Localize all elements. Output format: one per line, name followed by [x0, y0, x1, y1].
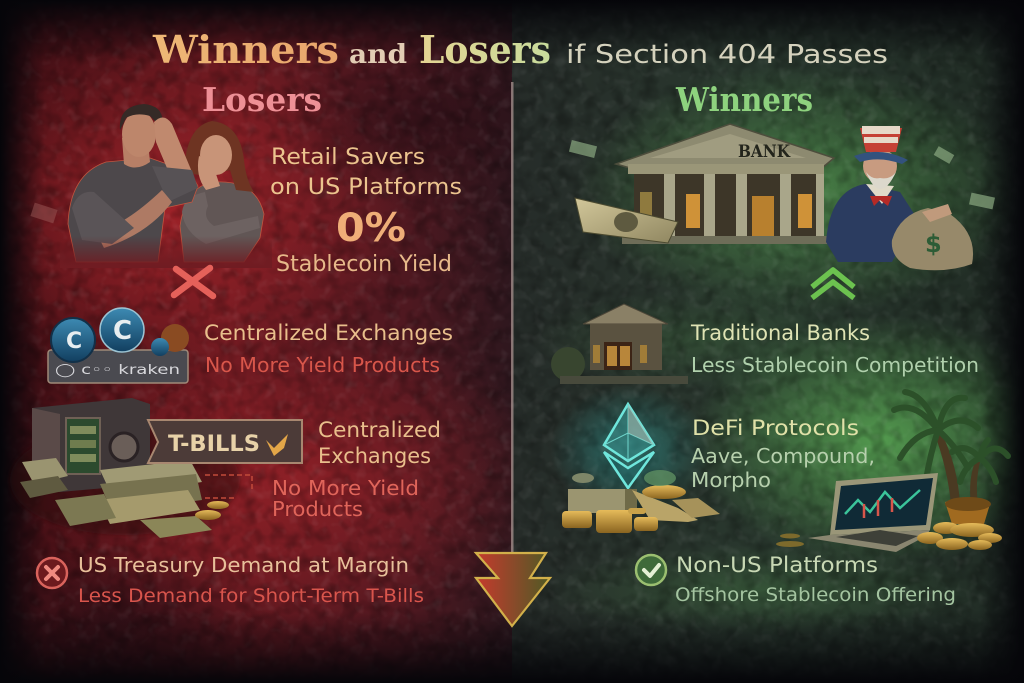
illustration: small bank: [551, 304, 688, 384]
text: non-US platforms: [675, 553, 956, 606]
heading: Winners: Winners: [675, 80, 813, 119]
label: T-bills plaque: [148, 420, 302, 463]
text: centralized exchanges 2: Exchanges: [318, 444, 431, 468]
text: centralized exchanges 2: Centralized: [318, 418, 441, 442]
illustration: palm trees: [894, 392, 1008, 505]
text: US treasury demand: Less Demand for Short-Term T-Bills: [78, 585, 424, 607]
illustration: uncle sam: [569, 126, 995, 270]
panel: losers background: [0, 0, 580, 683]
text: retail savers: on US Platforms: [270, 175, 462, 200]
text: centralized exchanges 2: [272, 418, 441, 521]
illustration: safe and cash: [10, 398, 252, 538]
text: centralized exchanges 2: No More Yield: [272, 476, 419, 500]
title: Losers: [419, 27, 551, 72]
woman: [180, 182, 264, 262]
text: centralized exchanges: Centralized Exchanges: [204, 321, 453, 345]
icon: green double chevron: [812, 270, 854, 298]
text: DeFi protocols: Aave, Compound,: [691, 444, 875, 468]
illustration: worried couple: [30, 104, 272, 268]
text: centralized exchanges: [204, 321, 453, 377]
label: T-bills plaque: T-BILLS: [168, 432, 260, 457]
illustration: gold coins: [776, 497, 1002, 550]
text: US treasury demand: [78, 553, 424, 607]
text: DeFi protocols: Morpho: [691, 468, 771, 492]
illustration: exchange logos: C: [113, 316, 132, 346]
text: centralized exchanges 2: Products: [272, 497, 363, 521]
text: retail savers: Retail Savers: [271, 145, 425, 170]
heading: Losers: Losers: [202, 80, 322, 119]
illustration: dollar bill: [575, 198, 678, 243]
illustration: exchange logos: C: [66, 329, 82, 354]
title: [152, 27, 888, 72]
icon: down arrow: [476, 553, 550, 626]
text: non-US platforms: Non-US Platforms: [676, 553, 878, 577]
icon: ethereum diamond: [604, 404, 654, 488]
illustration: cash and coins: [562, 470, 720, 533]
illustration: large bank: [616, 124, 834, 244]
panel: winners background: [512, 0, 1024, 683]
center divider: [511, 82, 514, 556]
text: US treasury demand: US Treasury Demand at Margin: [78, 553, 409, 577]
text: DeFi protocols: DeFi Protocols: [692, 416, 859, 440]
icon: green check circle: [636, 555, 666, 585]
text: retail savers: [270, 145, 462, 277]
text: traditional banks: Traditional Banks: [690, 321, 870, 345]
man: [68, 158, 198, 262]
title: if Section 404 Passes: [566, 40, 888, 70]
icon: red x circle: [37, 558, 67, 588]
text: traditional banks: [690, 321, 979, 377]
text: non-US platforms: Offshore Stablecoin Offering: [675, 584, 956, 606]
illustration: large bank: BANK: [738, 142, 791, 162]
illustration: exchange logos: ◯ c◦◦ kraken: [55, 363, 180, 378]
icon: red cross: [174, 268, 213, 296]
text: DeFi protocols: [691, 416, 875, 492]
text: retail savers: Stablecoin Yield: [276, 252, 452, 277]
illustration: exchange logos: [48, 308, 189, 383]
illustration: uncle sam: $: [925, 230, 942, 258]
text: retail savers: 0%: [336, 206, 406, 251]
title: and: [349, 40, 407, 70]
text: centralized exchanges: No More Yield Products: [205, 353, 440, 377]
title: Winners: [152, 27, 339, 72]
text: traditional banks: Less Stablecoin Competition: [691, 353, 979, 377]
illustration: laptop: [808, 473, 938, 552]
figures fading into background: [60, 236, 272, 268]
